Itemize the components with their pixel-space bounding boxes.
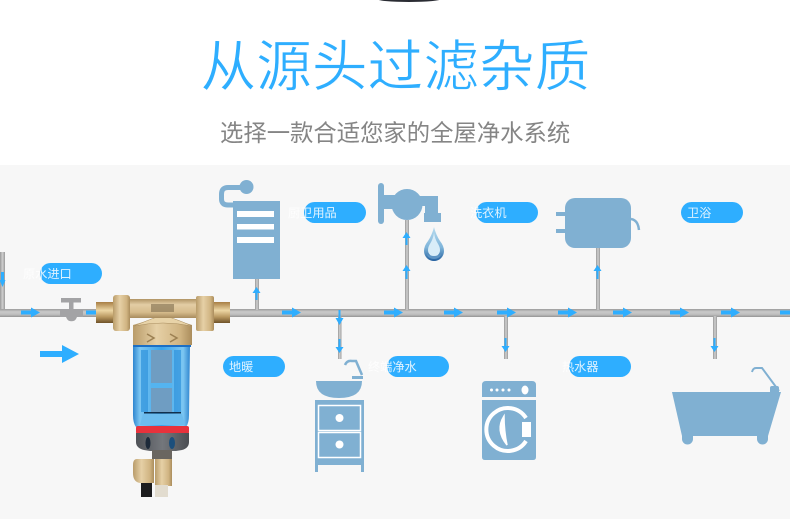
label: washing machine: 洗衣机 — [470, 205, 507, 220]
arrow: large inlet direction — [40, 345, 79, 363]
icon: washing machine — [482, 381, 536, 460]
panel: water system diagram — [0, 165, 790, 519]
label: floor heating — [223, 356, 285, 377]
label: washing machine — [470, 202, 538, 223]
icon: water heater — [556, 198, 639, 248]
red ring — [136, 426, 189, 434]
label: kitchen and bath supplies — [288, 202, 366, 223]
threads — [96, 302, 114, 323]
icon: gas boiler — [222, 180, 280, 279]
main water pipes — [0, 220, 790, 359]
label: point-of-use purifier — [368, 356, 449, 377]
bowl — [133, 345, 190, 427]
top edge dark shape — [377, 0, 441, 2]
icon: water drop — [424, 227, 444, 261]
icon: bathtub — [672, 368, 781, 444]
grey cap — [136, 433, 189, 451]
neck — [133, 317, 192, 345]
brand mark — [151, 304, 174, 312]
icon: pre-filter — [96, 295, 230, 497]
label: raw water inlet — [23, 263, 102, 284]
label: water heater — [562, 356, 631, 377]
label: raw water inlet: 原水进口 — [23, 267, 72, 281]
label: point-of-use purifier: 终端净水 — [368, 359, 417, 374]
label: bathroom: 卫浴 — [687, 206, 711, 220]
title: 从源头过滤杂质 — [200, 36, 590, 98]
drain valve — [152, 450, 172, 459]
main body — [129, 299, 197, 318]
label: floor heating: 地暖 — [229, 360, 253, 374]
icon: faucet — [378, 183, 441, 224]
icon: washbasin cabinet — [315, 361, 364, 472]
icon: inlet valve — [60, 298, 83, 321]
subtitle: 选择一款合适您家的全屋净水系统 — [220, 120, 570, 146]
label: bathroom — [681, 202, 743, 223]
flow arrows — [0, 232, 790, 353]
label: water heater: 热水器 — [562, 360, 599, 374]
label: kitchen and bath supplies: 厨卫用品 — [288, 206, 337, 220]
